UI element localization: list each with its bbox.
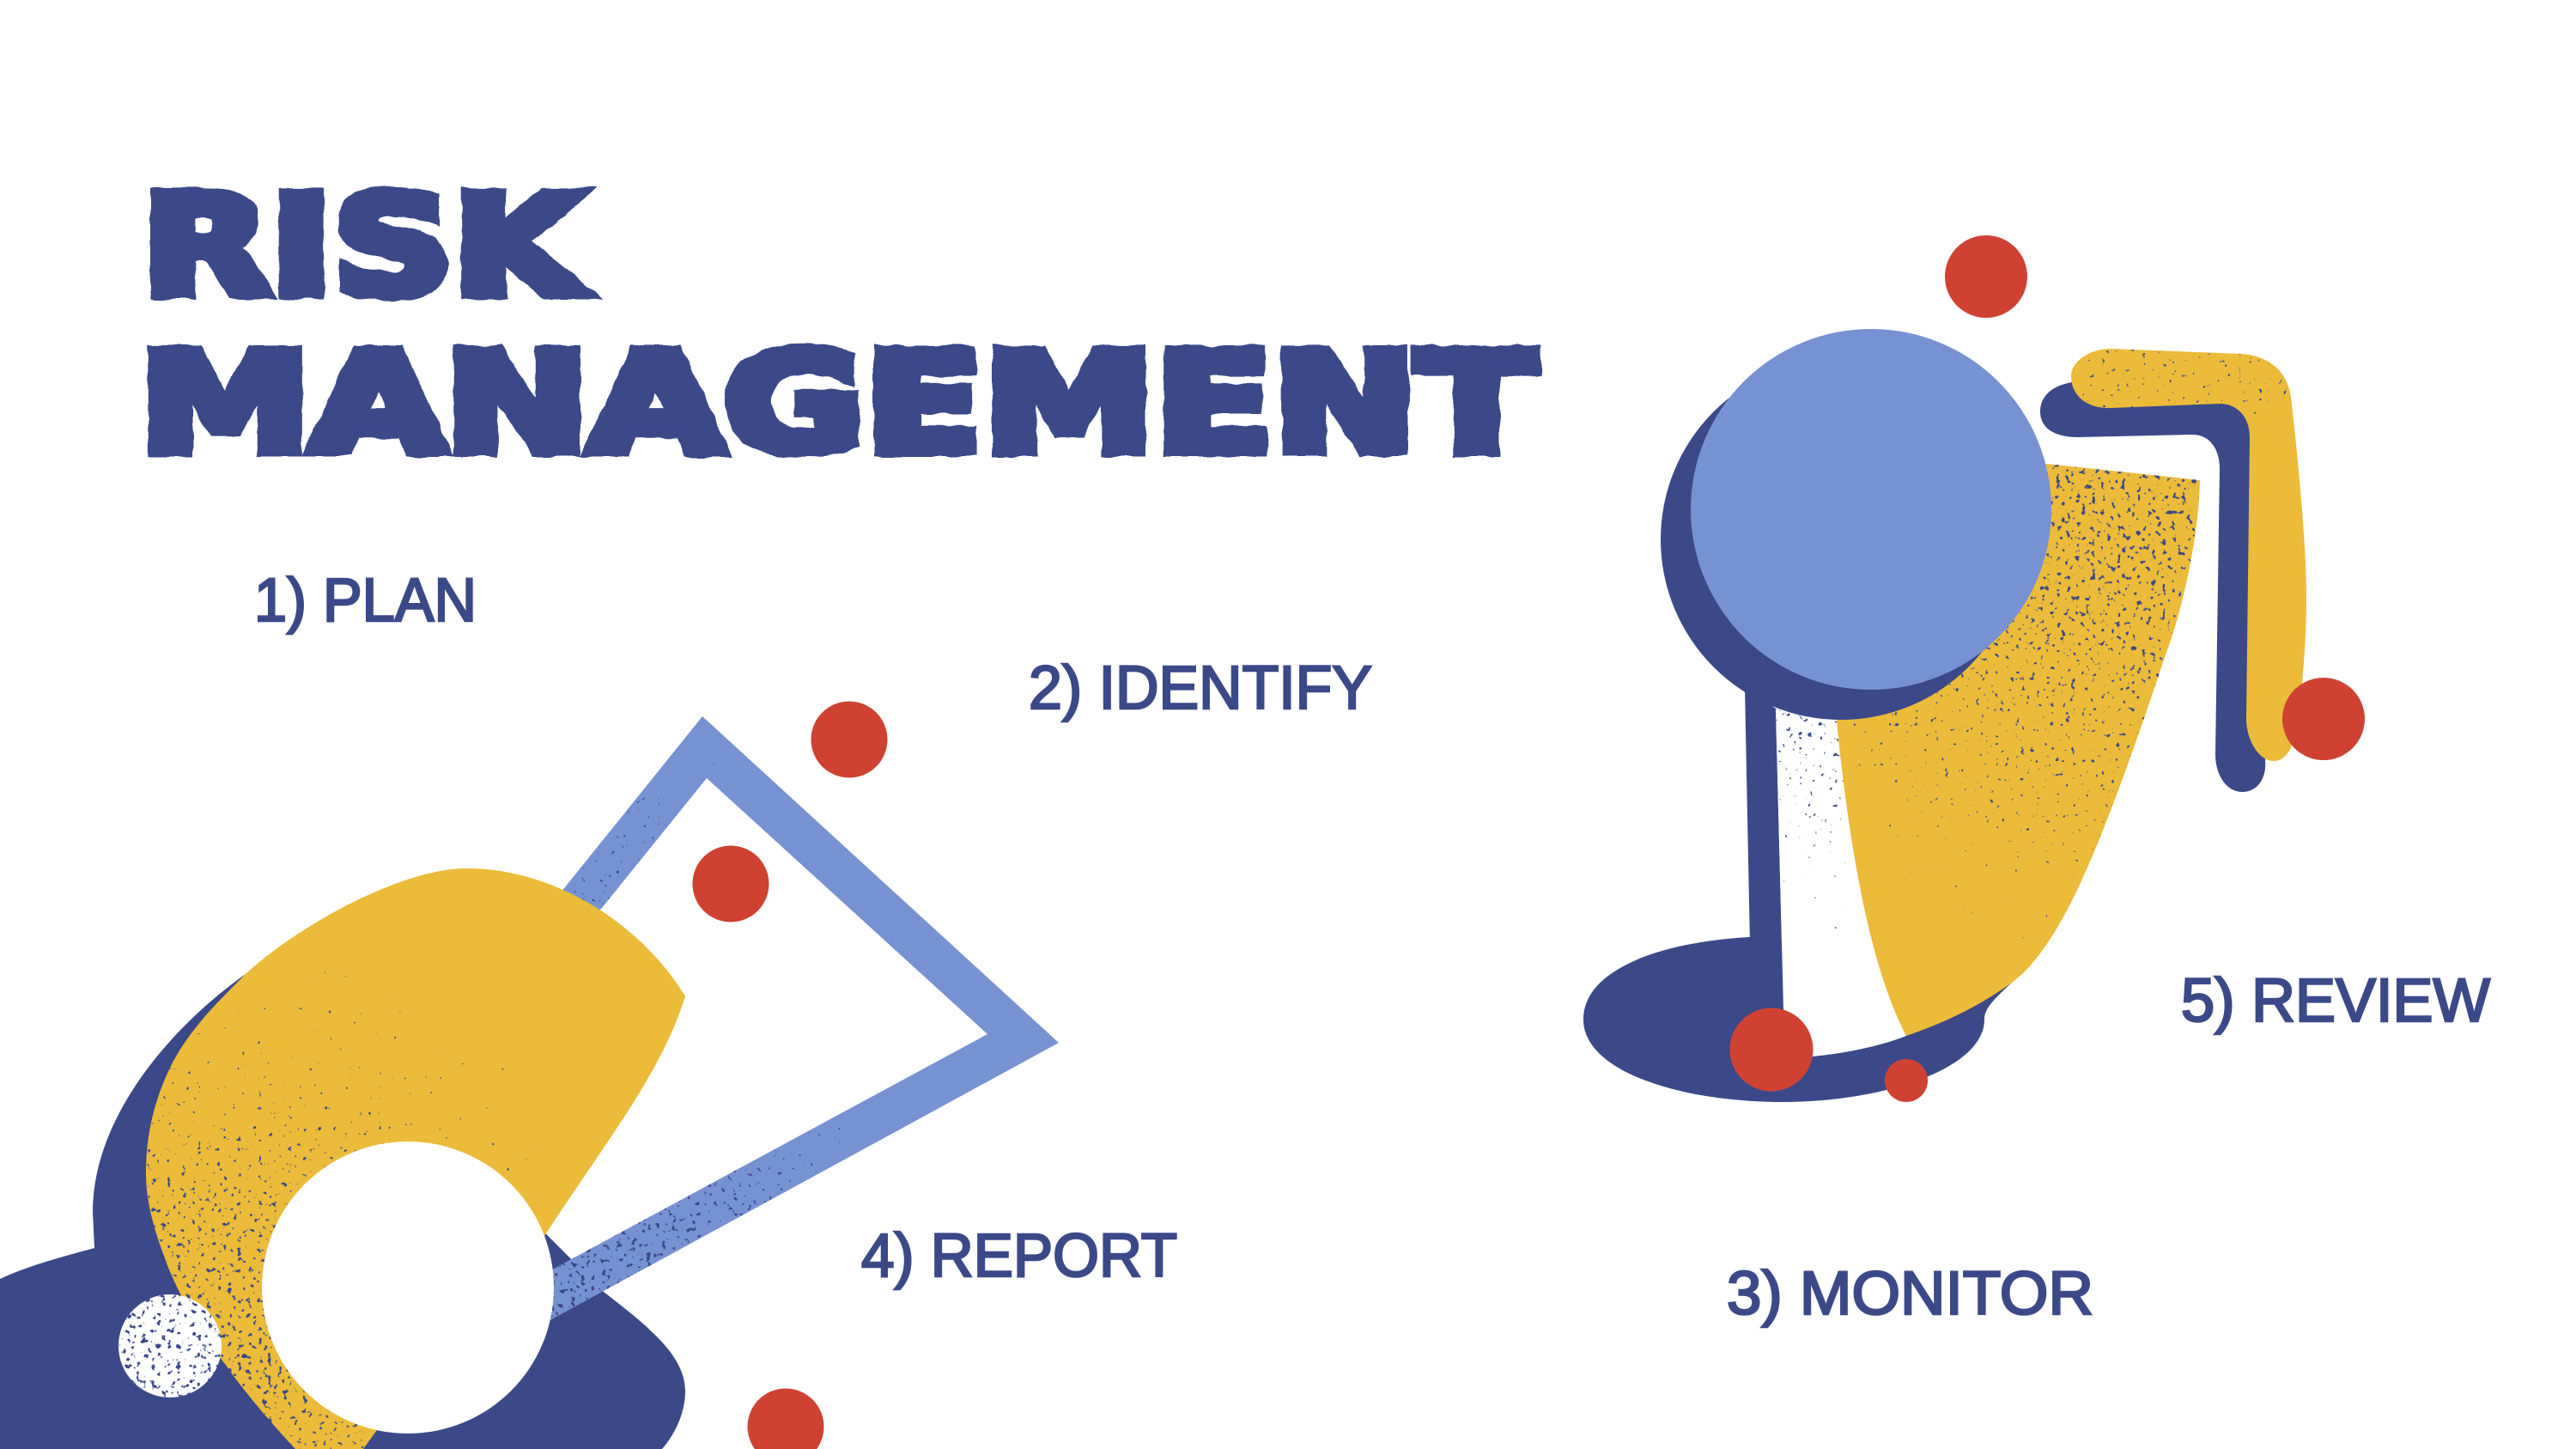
texture: cone speckles (1843, 465, 2199, 938)
dot: red base small (1885, 1059, 1928, 1102)
dot: red bottom (747, 1388, 824, 1449)
label: step 2 identify: 2) IDENTIFY (1029, 654, 1372, 722)
dot: red above kite (811, 701, 888, 778)
shape: navy base ellipse (1583, 937, 2012, 1102)
title: RISK (142, 166, 587, 326)
illustration: abstract shapes bottom left (0, 701, 1065, 1449)
label: step 1 plan: 1) PLAN (254, 567, 477, 635)
shape: navy blob (0, 974, 685, 1449)
texture: arm speckles (2073, 349, 2287, 416)
shape: yellow cone (1829, 464, 2200, 1036)
shape: navy stem (1745, 687, 1795, 1009)
label: step 5 review: 5) REVIEW (2181, 967, 2490, 1035)
texture: kite speckles (481, 713, 1065, 1366)
shape: yellow blob (146, 868, 685, 1449)
dot: red top (1945, 235, 2027, 318)
label: step 3 monitor: 3) MONITOR (1727, 1260, 2093, 1328)
title (139, 166, 1535, 484)
shape: navy arm (2040, 378, 2275, 792)
shape: navy circle shadow (1661, 359, 2021, 720)
dot: red right (2282, 678, 2365, 760)
label: step 4 report: 4) REPORT (861, 1222, 1177, 1290)
title: MANAGEMENT (139, 323, 1535, 484)
shape: white circle (262, 1142, 554, 1434)
illustration: abstract figure right (1583, 235, 2365, 1102)
texture: yellow blob speckles (137, 945, 567, 1449)
shape: white strip (1776, 709, 1906, 1063)
dot: red base large (1729, 1008, 1814, 1091)
shape: yellow arm (2071, 349, 2306, 761)
shape: blue circle (1691, 329, 2051, 690)
shape: speckled white ball (118, 1294, 222, 1397)
shape: blue kite outline (412, 716, 1059, 1358)
texture: strip speckles (1776, 709, 1850, 928)
dot: red inside kite (692, 845, 769, 922)
